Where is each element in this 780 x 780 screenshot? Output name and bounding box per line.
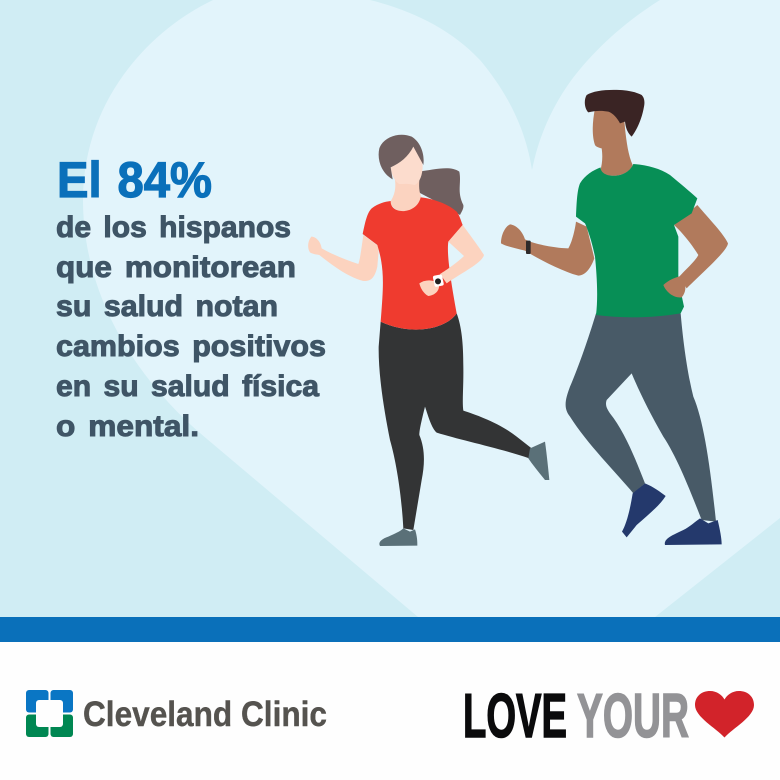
logo wordmark: Cleveland Clinic: Cleveland Clinic bbox=[83, 695, 327, 734]
text block: statistic description: o mental. bbox=[56, 410, 199, 443]
headline: El 84%: El 84% bbox=[57, 152, 212, 208]
blue divider band bbox=[0, 617, 780, 642]
slogan: LOVE YOUR heart: YOUR bbox=[577, 682, 689, 751]
text block: statistic description bbox=[56, 211, 326, 443]
logo icon: Cleveland Clinic cross bbox=[26, 690, 73, 737]
illustration: woman jogging bbox=[308, 135, 549, 546]
footer panel bbox=[0, 642, 780, 780]
icon: red heart bbox=[695, 691, 754, 738]
text block: statistic description: en su salud física bbox=[56, 370, 319, 403]
background heart bbox=[83, 0, 780, 617]
text block: statistic description: de los hispanos bbox=[56, 211, 291, 244]
panel: light blue background bbox=[0, 0, 780, 617]
text block: statistic description: cambios positivos bbox=[56, 330, 326, 363]
slogan: LOVE YOUR heart bbox=[463, 682, 754, 751]
slogan: LOVE YOUR heart: LOVE bbox=[463, 682, 567, 751]
text block: statistic description: su salud notan bbox=[56, 290, 278, 323]
illustration: man jogging bbox=[501, 90, 728, 545]
text block: statistic description: que monitorean bbox=[56, 251, 296, 284]
